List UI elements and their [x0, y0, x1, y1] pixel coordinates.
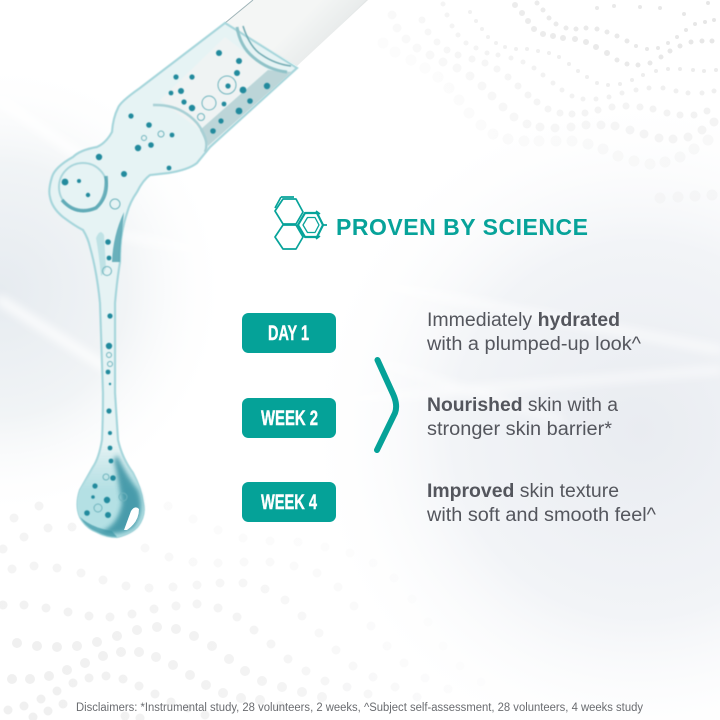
dropper with serum drop: [49, 0, 368, 537]
disclaimer: Disclaimers: *Instrumental study, 28 volunteers, 2 weeks, ^Subject self-assessment, 28 volunteers, 4 weeks study: [76, 702, 643, 714]
badge: week 2: [242, 398, 336, 438]
text: week 2 benefit: Nourished skin with a: [427, 395, 618, 416]
dot pattern: bottom left: [3, 506, 481, 718]
arrow: chevron: [377, 360, 396, 450]
collars: [237, 27, 287, 72]
bubble in bulb: [59, 163, 107, 211]
serum body outline: [49, 23, 297, 537]
inner glass highlight: [160, 37, 268, 130]
text: week 2 benefit: stronger skin barrier*: [427, 419, 613, 440]
dot pattern: top right: [383, 3, 716, 198]
text: week 2 benefit: [427, 395, 618, 440]
text: day 1 benefit: Immediately hydrated: [427, 310, 620, 331]
serum bubbles: [62, 50, 270, 518]
text: week 4 benefit: with soft and smooth feel^: [426, 505, 656, 526]
badge: week 4: WEEK 4: [261, 491, 317, 514]
badge: day 1: DAY 1: [268, 322, 309, 345]
glass tube: [225, 0, 368, 66]
icon: molecule hexagons: [275, 197, 327, 249]
badge: week 2: WEEK 2: [261, 407, 318, 430]
drop shading: [78, 440, 144, 537]
badge: week 4: [242, 482, 336, 522]
stem shading: [112, 212, 124, 262]
badge: day 1: [242, 313, 336, 353]
text: day 1 benefit: with a plumped-up look^: [426, 334, 641, 355]
text: week 4 benefit: Improved skin texture: [427, 481, 619, 502]
text: day 1 benefit: [426, 310, 641, 355]
text: week 4 benefit: [426, 481, 656, 526]
title: PROVEN BY SCIENCE: [336, 214, 588, 240]
